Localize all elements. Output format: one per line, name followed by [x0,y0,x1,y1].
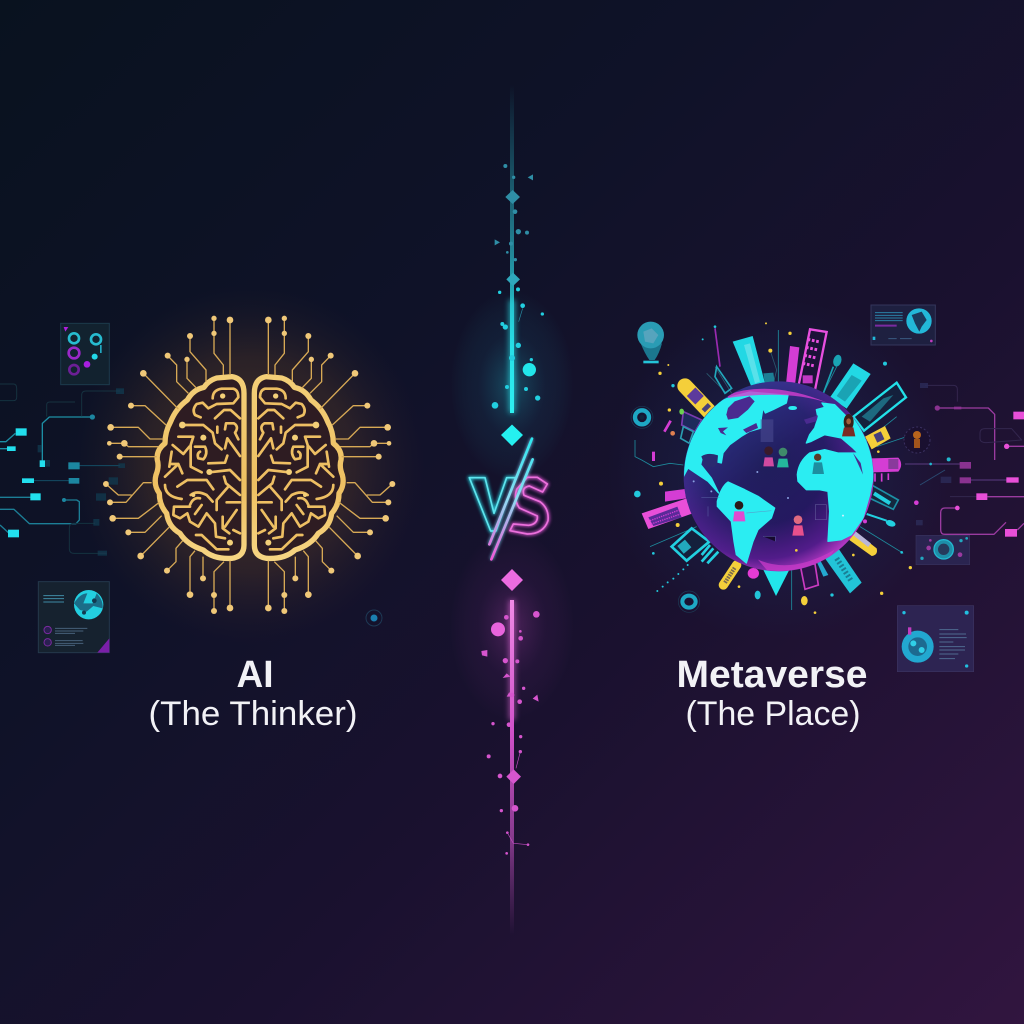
avatars [733,414,855,536]
widget: small ring panel [916,535,970,565]
widget: lower globe panel [897,606,974,672]
globe glow [608,300,948,640]
VS neon glow [469,439,548,559]
magenta line [510,600,514,935]
panel: Metaverse side [608,300,1024,733]
divider glows [450,290,574,720]
small dots [634,322,919,614]
widget: data panel [38,582,109,653]
subtitle: The Place: (The Place) [686,695,860,733]
icon: circuit brain [103,316,395,614]
VS lettering [469,439,548,559]
widget: rings panel [61,323,109,385]
widget: top data panel [871,305,935,345]
right circuit traces [905,383,1024,537]
widget: location hologram [637,322,664,363]
background filaments [635,327,907,610]
spoke shapes [642,328,906,605]
icon: metaverse spokes [631,322,919,614]
left circuit traces [0,384,125,556]
magenta diamonds and particles [481,611,540,855]
title: Metaverse: Metaverse [676,654,868,696]
subtitle: The Thinker: (The Thinker) [148,695,358,733]
widget: ring left [631,406,653,428]
panel: AI side [0,285,425,733]
globe [683,381,878,571]
widget: avatar badge [904,427,930,453]
brain glow [75,285,425,645]
title: AI: AI [236,654,274,696]
icon: small locator [366,610,382,626]
widget: ring bottom [678,591,700,612]
icon: magenta diamond [501,569,523,591]
icon: cyan diamond [501,424,523,446]
cyan diamonds and particles [492,164,544,409]
cyan line [510,85,514,413]
panel: centre divider [450,85,574,935]
